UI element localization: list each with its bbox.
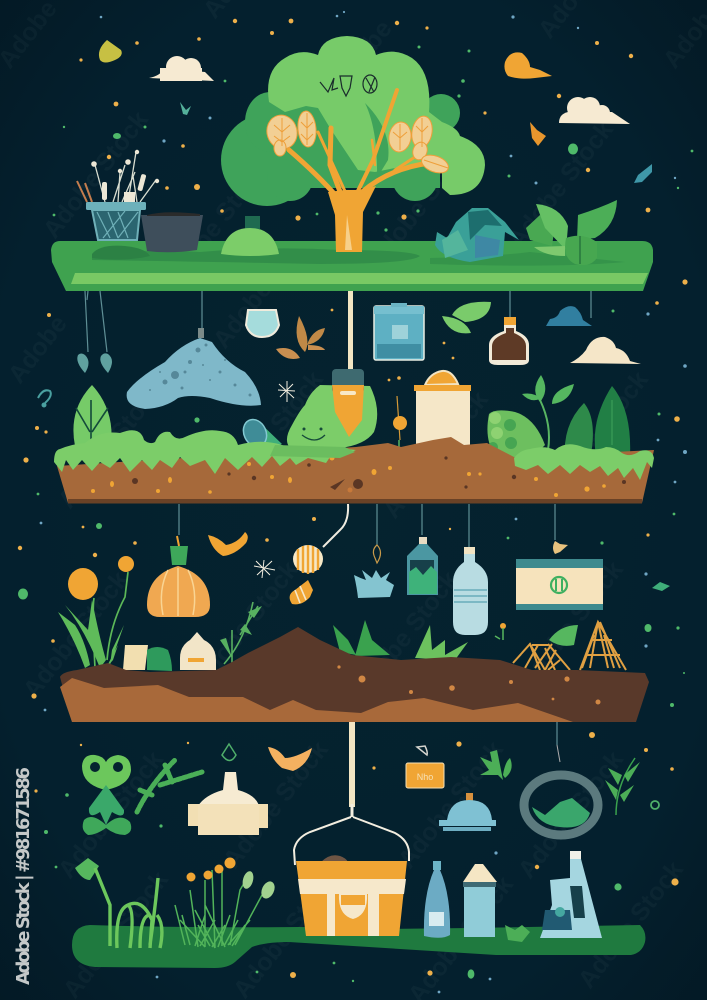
- blue stippled mound: [127, 328, 261, 409]
- teal cabbage: [435, 208, 519, 262]
- canopy back lobes: [221, 92, 460, 206]
- blue cloud: [546, 306, 592, 326]
- trunk and branches: [289, 90, 430, 200]
- cream bin: [414, 371, 471, 445]
- left cloud: [149, 56, 214, 81]
- leafy plant: [526, 200, 617, 265]
- leaf veins: [274, 113, 448, 168]
- panel: lower hanging items: [13, 722, 659, 985]
- water bottle: [453, 547, 488, 635]
- sprig plant: [220, 602, 262, 664]
- tree: [221, 36, 485, 252]
- panel: compost grass layer: [38, 291, 654, 504]
- sprig right: [605, 758, 640, 815]
- green bottom strip: [72, 925, 645, 968]
- blue storage box: [374, 303, 424, 360]
- green smiling blob with scoop: [287, 369, 377, 448]
- right cloud: [559, 97, 630, 124]
- watermark: Adobe Stock: [513, 556, 629, 694]
- watermark: Adobe Stock: [158, 156, 274, 294]
- watermark: Adobe Stock: [378, 386, 494, 524]
- left fern stalks: [75, 858, 162, 948]
- small crown glyphs: [320, 75, 377, 96]
- mound soil: [60, 627, 649, 722]
- dark orange moth: [530, 122, 546, 146]
- fern sprig top right: [480, 750, 512, 780]
- sprout: [522, 375, 574, 450]
- brown bottle: [489, 291, 529, 365]
- soil body: [57, 437, 654, 503]
- hook and blue tuft: [354, 545, 394, 598]
- watermark: Adobe Stock: [573, 856, 689, 994]
- dark tall leaves: [565, 386, 630, 460]
- small leaf left mid: [652, 582, 670, 591]
- teal rocket: [634, 164, 652, 183]
- small green ring: [651, 801, 659, 809]
- bushy plant: [487, 410, 545, 460]
- orange blob: [504, 52, 552, 79]
- jar: [246, 310, 279, 337]
- watermark: Adobe Stock: [503, 116, 619, 254]
- fern and grass on mound: [333, 620, 468, 660]
- peach bird: [268, 747, 312, 771]
- green leaves: [442, 302, 491, 333]
- watermark: Adobe Stock: [538, 366, 654, 504]
- clip icon: [417, 746, 427, 755]
- panel: tree platform: [51, 36, 653, 371]
- decorative items: upper sky: [99, 40, 670, 591]
- white cable: [323, 504, 348, 547]
- watermark: Adobe Stock: [363, 136, 479, 274]
- stock id text: Adobe Stock | #981671586: [13, 767, 34, 985]
- small note icon: [38, 390, 51, 406]
- green branch: [137, 760, 202, 812]
- blue dome: [439, 793, 496, 831]
- watermark: Adobe Stock: [348, 566, 464, 704]
- string right: [556, 722, 558, 745]
- watermark: Adobe Stock: [53, 376, 169, 514]
- panel: dark soil layer: [58, 504, 649, 722]
- grey ring: [524, 745, 598, 835]
- canopy inner shadow: [365, 103, 389, 178]
- straw piles: [513, 622, 626, 670]
- watermark: Adobe Stock: [228, 866, 344, 1000]
- grass right: [514, 444, 654, 480]
- small green frog shape: [505, 925, 530, 942]
- basket with sticks: [77, 150, 159, 260]
- watermark: Adobe Stock: [218, 736, 334, 874]
- watermark: Adobe Stock: [38, 106, 154, 244]
- yellow leaf: [99, 40, 122, 62]
- orange bird: [208, 532, 248, 556]
- central rope: [348, 291, 353, 371]
- green table top: [51, 241, 653, 291]
- tilted cup: [239, 416, 282, 450]
- central rope lower: [349, 722, 355, 807]
- green clover figure: [82, 755, 131, 835]
- cream cloud lower: [570, 337, 641, 364]
- dark pot: [141, 212, 203, 252]
- small loop: [222, 744, 236, 760]
- label box: [516, 559, 603, 610]
- flasks: [540, 851, 602, 938]
- watermark: Adobe Stock: [393, 736, 509, 874]
- soil flecks: [91, 456, 606, 497]
- teal star bird: [180, 102, 191, 115]
- hanging strings: [179, 504, 555, 548]
- watermark: Adobe Stock: [58, 866, 174, 1000]
- green dome: [221, 216, 279, 256]
- wildflower tuft: [175, 858, 277, 948]
- watermark: Adobe Stock: [513, 746, 629, 884]
- grass left: [54, 430, 356, 474]
- green liquid bottle: [407, 537, 438, 595]
- striped ball: [293, 545, 323, 574]
- cream lantern: [188, 772, 268, 835]
- orange tag: Nho: [417, 772, 433, 782]
- bucket hanger: [294, 804, 409, 865]
- striped small vase: [290, 580, 313, 604]
- orange sprout and leaf: [495, 623, 578, 646]
- canopy light area: [268, 36, 485, 195]
- watermark: Adobe: [328, 15, 398, 94]
- small sprout lamp: [393, 396, 407, 448]
- hanging cream nut: [553, 541, 568, 554]
- sparkle: [278, 381, 295, 402]
- green dome tail: [270, 445, 355, 458]
- bucket: [296, 855, 407, 936]
- hanging strings top: [85, 291, 591, 352]
- light soil band: [60, 678, 573, 722]
- brown sprig: [276, 316, 325, 359]
- glass bottle: [424, 861, 450, 938]
- blue cylinder: [463, 864, 497, 937]
- onion: [147, 536, 210, 617]
- watermark: Adobe: [3, 310, 73, 389]
- cream box and jars: [123, 632, 216, 671]
- watermark: Adobe Stock: [188, 556, 304, 694]
- watermark: Adobe Stock: [213, 366, 329, 504]
- leaf plant left: [73, 385, 112, 446]
- watermark: Adobe Stock: [53, 746, 169, 884]
- yellow flowers: [58, 556, 134, 668]
- watermark: Adobe Stock: [18, 566, 134, 704]
- orange tag: [406, 763, 444, 788]
- sparkle: [254, 560, 275, 578]
- watermark: Adobe: [208, 275, 278, 354]
- soil specks: [337, 665, 600, 704]
- cream leaves: [263, 110, 451, 176]
- hanging seed drops: [77, 353, 112, 373]
